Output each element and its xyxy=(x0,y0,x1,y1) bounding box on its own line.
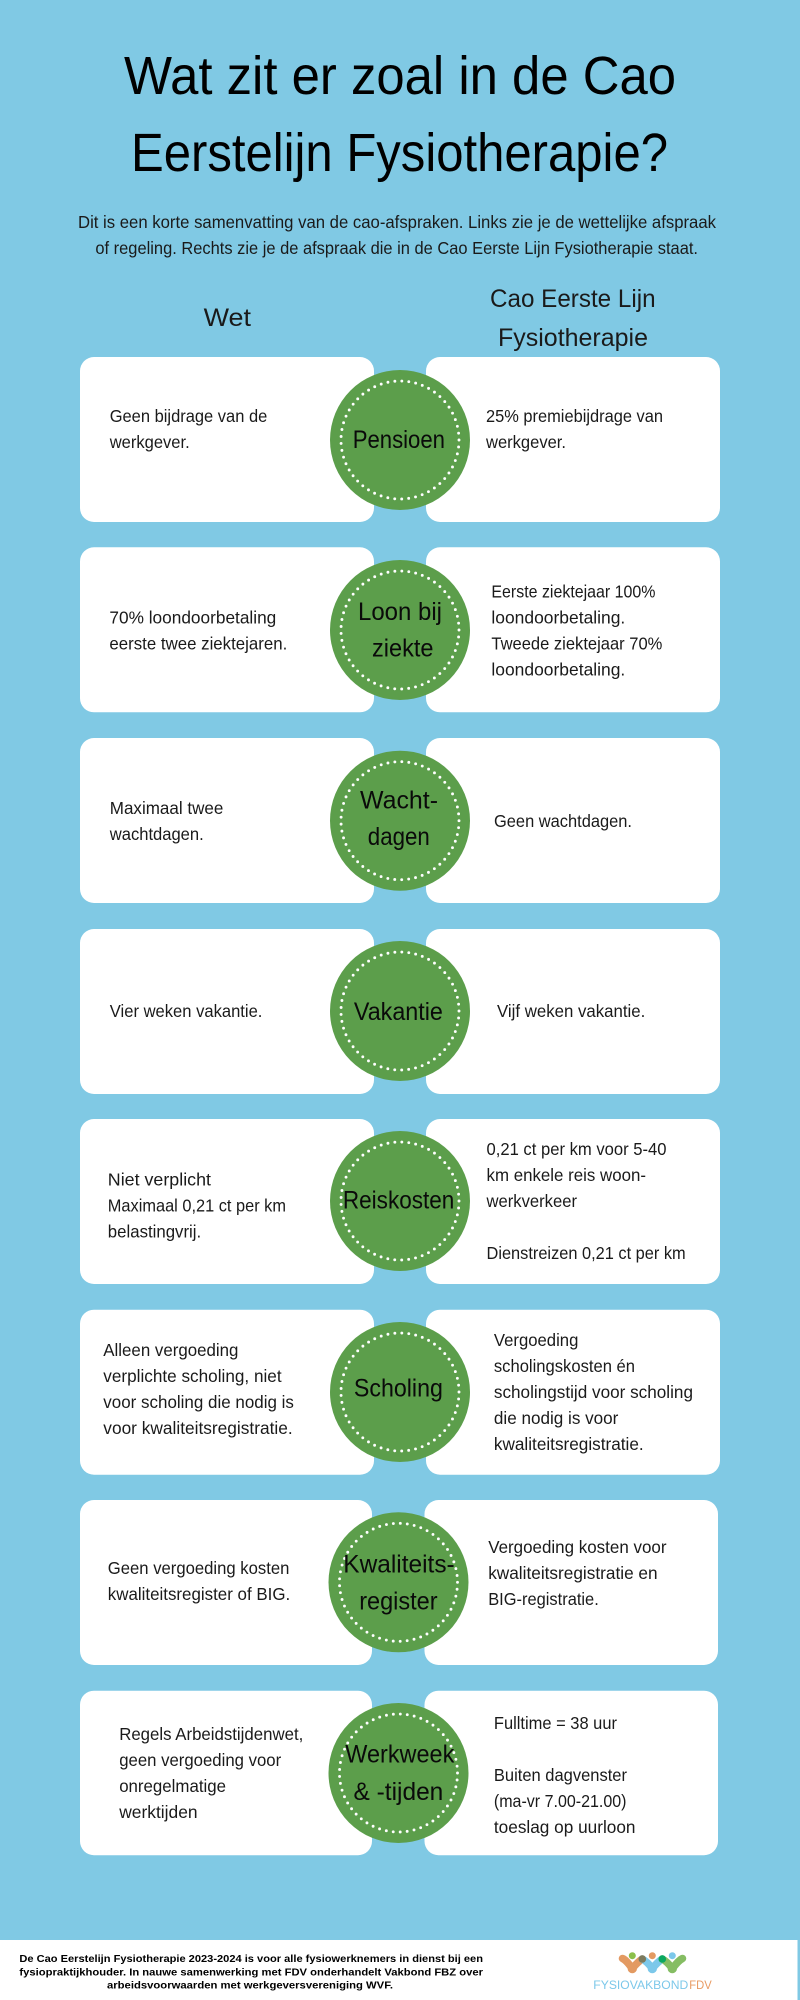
row: Scholing xyxy=(80,1310,720,1475)
card: wet Scholing: voor kwaliteitsregistratie. xyxy=(103,1418,293,1438)
badge: Wachtdagen: Wacht- xyxy=(360,786,438,814)
card: wet Reiskosten xyxy=(80,1119,374,1284)
card: cao Werkweek xyxy=(424,1691,718,1855)
badge: Kwaliteitsregister: register xyxy=(359,1587,438,1615)
card: wet Scholing: voor scholing die nodig is xyxy=(103,1392,294,1412)
card: wet Wachtdagen: Maximaal twee xyxy=(110,798,223,818)
card: wet Werkweek: werktijden xyxy=(118,1802,198,1822)
row: Pensioen xyxy=(80,357,720,522)
card: cao Reiskosten: Dienstreizen 0,21 ct per km xyxy=(486,1243,686,1263)
logo: FysiovakbondFDV: FDV xyxy=(689,1978,712,1992)
card: cao Scholing: kwaliteitsregistratie. xyxy=(494,1434,644,1454)
card: wet Kwaliteitsregister: Geen vergoeding kosten xyxy=(108,1558,289,1578)
title xyxy=(124,46,676,183)
card: wet Werkweek xyxy=(80,1691,372,1855)
card: wet Werkweek: Regels Arbeidstijdenwet, xyxy=(119,1724,303,1744)
column heading: Cao Eerste Lijn Fysiotherapie: Fysiotherapie xyxy=(498,324,648,352)
card: wet Scholing xyxy=(80,1310,374,1475)
badge: Loon bij ziekte xyxy=(330,560,470,700)
badge: Pensioen xyxy=(330,370,470,510)
card: wet Werkweek: geen vergoeding voor xyxy=(119,1750,281,1770)
logo: FysiovakbondFDV xyxy=(593,1952,712,1992)
card: cao Scholing: scholingskosten én xyxy=(494,1356,635,1376)
row: Wachtdagen xyxy=(80,738,720,903)
card: cao Scholing: scholingstijd voor scholing xyxy=(494,1382,693,1402)
card: wet Reiskosten: Niet verplicht xyxy=(108,1169,211,1189)
badge: Loon bij ziekte: Loon bij xyxy=(358,598,442,626)
card: cao Wachtdagen: Geen wachtdagen. xyxy=(494,811,632,831)
badge: Scholing: Scholing xyxy=(354,1375,443,1403)
badge: Werkweek en -tijden: & -tijden xyxy=(354,1778,443,1806)
card: wet Reiskosten: Maximaal 0,21 ct per km xyxy=(108,1195,286,1215)
card: cao Loon bij ziekte: Tweede ziektejaar 70% xyxy=(491,633,662,653)
card: cao Vakantie xyxy=(426,929,720,1094)
card: wet Kwaliteitsregister: kwaliteitsregister of BIG. xyxy=(108,1584,290,1604)
intro text xyxy=(78,212,716,258)
title: Eerstelijn Fysiotherapie? xyxy=(131,123,668,183)
column heading: Cao Eerste Lijn Fysiotherapie: Cao Eerste Lijn xyxy=(490,285,656,313)
badge: Loon bij ziekte: ziekte xyxy=(372,635,434,663)
card: cao Werkweek: toeslag op uurloon xyxy=(494,1817,636,1837)
card: cao Loon bij ziekte xyxy=(426,547,720,712)
row: Reiskosten xyxy=(80,1119,720,1284)
intro text: Dit is een korte samenvatting van de cao-afspraken. Links zie je de wettelijke afspraak xyxy=(78,212,716,232)
intro text: of regeling. Rechts zie je de afspraak die in de Cao Eerste Lijn Fysiotherapie staat. xyxy=(95,238,698,258)
row: Werkweek en -tijden xyxy=(80,1691,718,1855)
card: cao Loon bij ziekte: loondoorbetaling. xyxy=(491,607,625,627)
card: cao Kwaliteitsregister: Vergoeding kosten voor xyxy=(488,1537,667,1557)
badge: Vakantie: Vakantie xyxy=(354,998,443,1026)
card: wet Scholing: verplichte scholing, niet xyxy=(103,1366,282,1386)
card: wet Pensioen: Geen bijdrage van de xyxy=(110,406,267,426)
footer xyxy=(0,1940,798,2000)
card: cao Pensioen xyxy=(426,357,720,522)
card: cao Reiskosten: 0,21 ct per km voor 5-40 xyxy=(486,1139,667,1159)
badge: Wachtdagen: dagen xyxy=(368,823,430,851)
footer note: De Cao Eerstelijn Fysiotherapie 2023-2024 is voor alle fysiowerknemers in dienst bij een xyxy=(19,1953,483,1965)
badge: Reiskosten: Reiskosten xyxy=(343,1187,454,1215)
card: cao Pensioen: 25% premiebijdrage van xyxy=(486,406,663,426)
card: cao Reiskosten: werkverkeer xyxy=(486,1191,577,1211)
badge: Pensioen: Pensioen xyxy=(353,426,445,454)
badge: Kwaliteitsregister xyxy=(328,1512,468,1652)
card: wet Wachtdagen xyxy=(80,738,374,903)
card: cao Scholing: die nodig is voor xyxy=(494,1408,619,1428)
badge: Scholing xyxy=(330,1322,470,1462)
card: wet Loon bij ziekte xyxy=(80,547,374,712)
badge: Werkweek en -tijden xyxy=(328,1703,468,1843)
row: Kwaliteitsregister xyxy=(80,1500,718,1665)
card: wet Scholing: Alleen vergoeding xyxy=(103,1340,238,1360)
card: wet Kwaliteitsregister xyxy=(80,1500,372,1665)
row: Vakantie xyxy=(80,929,720,1094)
card: wet Pensioen: werkgever. xyxy=(109,432,190,452)
card: cao Vakantie: Vijf weken vakantie. xyxy=(497,1001,645,1021)
title: Wat zit er zoal in de Cao xyxy=(124,46,676,106)
badge: Wachtdagen xyxy=(330,751,470,891)
row: Loon bij ziekte xyxy=(80,547,720,712)
card: wet Pensioen xyxy=(80,357,374,522)
card: wet Loon bij ziekte: eerste twee ziektejaren. xyxy=(109,633,287,653)
card: cao Werkweek: Fulltime = 38 uur xyxy=(494,1713,617,1733)
card: cao Loon bij ziekte: loondoorbetaling. xyxy=(491,659,625,679)
card: cao Kwaliteitsregister: kwaliteitsregistratie en xyxy=(488,1563,658,1583)
badge: Reiskosten xyxy=(330,1131,470,1271)
logo: FysiovakbondFDV: FYSIOVAKBOND xyxy=(593,1978,689,1992)
column heading: Wet: Wet xyxy=(204,304,251,332)
card: wet Wachtdagen: wachtdagen. xyxy=(109,824,204,844)
card: cao Scholing: Vergoeding xyxy=(494,1330,578,1350)
card: cao Reiskosten: km enkele reis woon- xyxy=(486,1165,646,1185)
card: cao Werkweek: (ma-vr 7.00-21.00) xyxy=(494,1791,626,1811)
column heading: Cao Eerste Lijn Fysiotherapie xyxy=(490,285,656,352)
card: cao Wachtdagen xyxy=(426,738,720,903)
badge: Werkweek en -tijden: Werkweek xyxy=(345,1741,455,1769)
card: cao Werkweek: Buiten dagvenster xyxy=(494,1765,627,1785)
card: wet Werkweek: onregelmatige xyxy=(119,1776,226,1796)
card: cao Scholing xyxy=(426,1310,720,1475)
badge: Vakantie xyxy=(330,941,470,1081)
card: cao Loon bij ziekte: Eerste ziektejaar 100% xyxy=(491,581,656,601)
card: cao Kwaliteitsregister: BIG-registratie. xyxy=(488,1589,599,1609)
card: cao Reiskosten xyxy=(426,1119,720,1284)
card: wet Reiskosten: belastingvrij. xyxy=(108,1221,201,1241)
card: cao Kwaliteitsregister xyxy=(424,1500,718,1665)
footer note: arbeidsvoorwaarden met werkgeversvereniging WVF. xyxy=(107,1980,393,1992)
card: wet Vakantie xyxy=(80,929,374,1094)
badge: Kwaliteitsregister: Kwaliteits- xyxy=(343,1551,455,1579)
footer note xyxy=(19,1953,483,1992)
card: wet Loon bij ziekte: 70% loondoorbetaling xyxy=(109,607,276,627)
footer note: fysiopraktijkhouder. In nauwe samenwerking met FDV onderhandelt Vakbond FBZ over xyxy=(19,1966,483,1978)
card: cao Pensioen: werkgever. xyxy=(485,432,566,452)
card: wet Vakantie: Vier weken vakantie. xyxy=(110,1001,262,1021)
